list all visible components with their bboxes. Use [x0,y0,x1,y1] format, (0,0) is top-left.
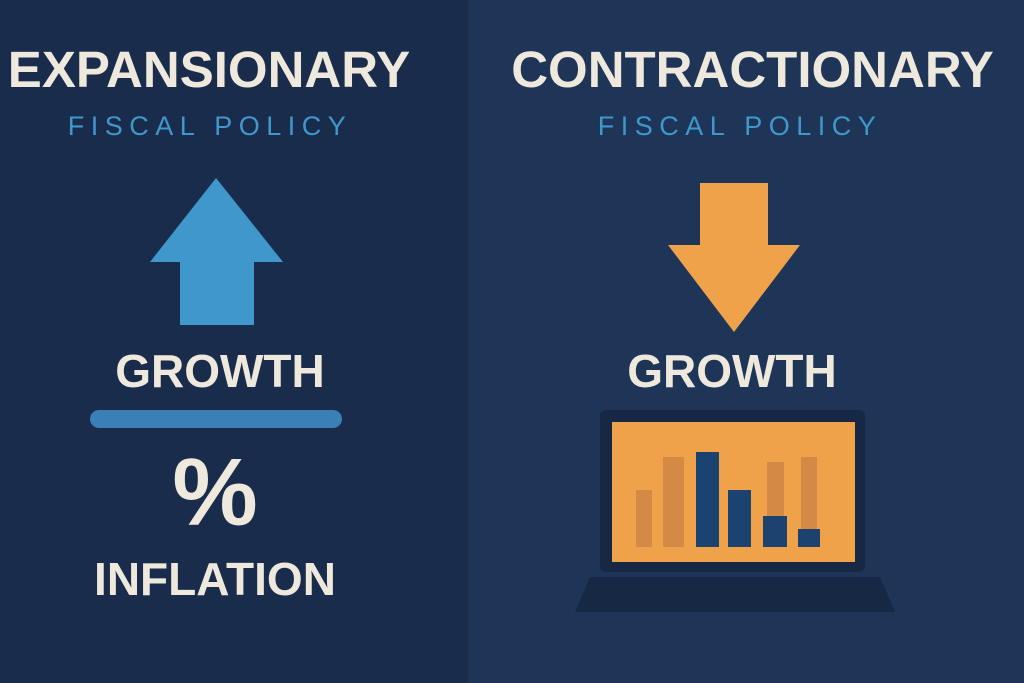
label: growth left: GROWTH [115,345,325,397]
icon: percent: % [172,439,258,546]
title: expansionary: EXPANSIONARY [8,41,410,98]
label: inflation: INFLATION [94,553,336,605]
title: contractionary: CONTRACTIONARY [511,41,994,98]
subtitle: fiscal policy right: FISCAL POLICY [598,111,882,141]
label: growth right: GROWTH [627,345,837,397]
subtitle: fiscal policy left: FISCAL POLICY [68,111,352,141]
divider bar [90,410,342,428]
